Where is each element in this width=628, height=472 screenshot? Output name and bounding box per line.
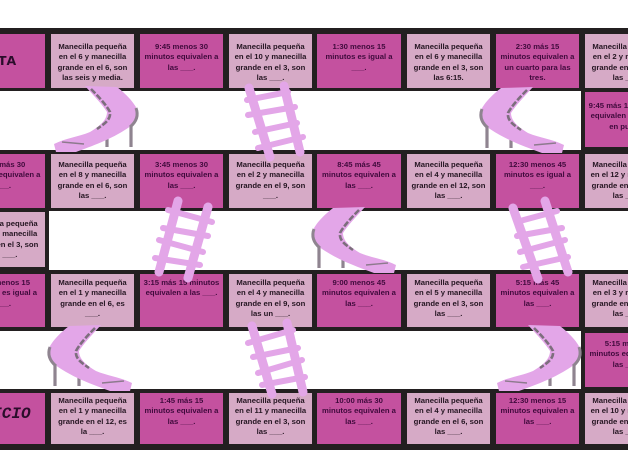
square: 4 y 12: en el 4 y manecilla [415,170,482,179]
square: 4 y 12: Manecilla pequeña [414,160,483,169]
square: 4 y 9: grande en el 9, son [236,299,305,308]
slide: middle [312,207,396,273]
square: 4 y 9: Manecilla pequeña [236,278,305,287]
square: 2 y 9: en el 2 y manecilla [237,170,304,179]
square: 12:30 menos 15: las ___. [524,417,551,426]
square: 4 y 12: las ___. [435,191,462,200]
square: 8 y 6 [51,154,134,208]
square: 9:00 menos 45: las ___. [345,299,373,308]
square: 1:30 menos 15 [317,34,401,88]
square: 3 y manecilla [585,274,628,327]
square: 12 y manecilla [585,154,628,208]
ladder: bottom [248,323,305,394]
square: 9:45 menos 30: minutos equivalen a [145,52,218,61]
square: 12:30 menos 15 [496,393,579,444]
square: 1:45 más 15 [140,393,223,444]
square: 2 y 9: grande en el 9, son [236,181,305,190]
square: 12:30 menos 45: minutos es igual a [504,170,571,179]
square: 8:45 más 45: 8:45 más 45 [337,160,381,169]
square: 5:15 más 45: minutos equivalen a [501,288,574,297]
white lane 1 [0,91,581,150]
square: 6 y 3: en el 6 y manecilla [415,52,482,61]
square: 5 y 3: en el 5 y manecilla [415,288,482,297]
square: 4 y 12: grande en el 12, son [412,181,485,190]
square: 4 y 6: en el 4 y manecilla [415,406,482,415]
square: 9:45 menos 30 [140,34,223,88]
square: 4 y 6: Manecilla pequeña [414,396,483,405]
square: 11 y 3: grande en el 3, son [236,417,305,426]
square: 4 y 6: las ___. [435,427,462,436]
white lane 3 [0,331,581,389]
slide: bottom left [48,325,132,391]
square: 6 y 3: grande en el 3, son [414,63,483,72]
square: 9:00 menos 45 [317,274,401,327]
square: 5 y 3: las ___. [435,309,462,318]
square: 2 y 9: Manecilla pequeña [236,160,305,169]
square: más 30 [0,154,45,208]
square: 10 y 3: Manecilla pequeña [236,42,305,51]
square: 10 y 3: grande en el 3, son [236,63,305,72]
square: 10 y 3: las ___. [257,73,284,82]
square: 4 y 6: grande en el 6, son [414,417,483,426]
slide: top left [54,86,138,152]
square: 8:45 más 45: las ___. [345,181,373,190]
square: 9:00 menos 45: 9:00 menos 45 [332,278,386,287]
side square: 9:45 más 15 [585,92,628,147]
square: seis y media [51,34,134,88]
square: 1 y 6: ___. [85,309,100,318]
square: 11 y 3: las ___. [257,427,284,436]
square: 12:30 menos 15: 12:30 menos 15 [509,396,566,405]
square: 1 y 12: Manecilla pequeña [58,396,127,405]
square: 4 y 6 [407,393,490,444]
square: 1:45 más 15: minutos equivalen a [145,406,218,415]
square: 2:30 más 15: minutos equivalen a [501,52,574,61]
square: 10 y 3 [229,34,312,88]
square: 2:30 más 15: tres. [529,73,546,82]
square: 1 y 12: grande en el 12, es [58,417,127,426]
square: 1 y 6 [51,274,134,327]
square: seis y media: grande en el 6, son [58,63,127,72]
square: 1:30 menos 15: ___. [352,63,366,72]
square: 12:30 menos 45: 12:30 menos 45 [509,160,566,169]
square: 10:00 más 30 [317,393,401,444]
square: 2 y 9 [229,154,312,208]
square: 10:00 más 30: 10:00 más 30 [335,396,383,405]
square: seis y media: las seis y media. [62,73,123,82]
square: 1:30 menos 15: minutos es igual a [325,52,393,61]
side square: 3 [0,212,45,267]
square: 2:30 más 15: un cuarto para las [504,63,571,72]
square: 6 y 3: las 6:15. [433,73,464,82]
square: 8 y 6: Manecilla pequeña [58,160,127,169]
square: 1:30 menos 15: 1:30 menos 15 [332,42,386,51]
square: menos 15 [0,274,45,327]
square: 1 y 6: grande en el 6, es [60,299,125,308]
square: 2 y 9: ___. [263,191,278,200]
finish square: META [0,34,45,88]
ladder: middle right [513,201,568,279]
square: 5:15 más 45: las ___. [524,299,551,308]
square: 1:45 más 15: las ___. [168,417,195,426]
square: 4 y 12 [407,154,490,208]
square: 1 y 6: en el 1 y manecilla [59,288,126,297]
square: 1:45 más 15: 1:45 más 15 [160,396,203,405]
square: 5:15 más 45: 5:15 más 45 [516,278,559,287]
square: 8 y 6: las ___. [79,191,106,200]
square: 10:00 más 30: las ___. [345,417,373,426]
square: 8 y 6: grande en el 6, son [58,181,127,190]
square: 11 y 3: Manecilla pequeña [236,396,305,405]
square: 3:15 más 15: equivalen a las ___. [146,288,217,297]
square: 8:45 más 45 [317,154,401,208]
square: 3:45 menos 30: las ___. [168,181,195,190]
ladder: middle left [155,201,212,278]
square: 12:30 menos 45 [496,154,579,208]
square: 12:30 menos 15: minutos equivalen a [501,406,574,415]
square: 3:45 menos 30: minutos equivalen a [145,170,218,179]
slide: bottom right [497,325,581,391]
square: seis y media: Manecilla pequeña [58,42,127,51]
square: 11 y 3 [229,393,312,444]
slide: top right [480,87,564,153]
square: 3:45 menos 30: 3:45 menos 30 [155,160,208,169]
square: 10:00 más 30: minutos equivalen a [322,406,396,415]
side square: 5:15 [585,333,628,387]
square: 8:45 más 45: minutos equivalen a [322,170,396,179]
square: 3:15 más 15 [140,274,223,327]
square: 1 y 12 [51,393,134,444]
square: 12:30 menos 45: ___. [530,181,545,190]
square: 2:30 más 15: 2:30 más 15 [516,42,559,51]
square: 6 y 3 [407,34,490,88]
square: 3:15 más 15: 3:15 más 15 minutos [144,278,219,287]
square: 2:30 más 15 [496,34,579,88]
square: 6 y 3: Manecilla pequeña [414,42,483,51]
square: 2 y manecilla [585,34,628,88]
square: 1 y 12: en el 1 y manecilla [59,406,126,415]
square: 11 y 3: en el 11 y manecilla [235,406,306,415]
square: 9:45 menos 30: las ___. [168,63,195,72]
square: 8 y 6: en el 8 y manecilla [59,170,126,179]
square: 4 y 9 [229,274,312,327]
square: 10 y manecilla [585,393,628,444]
square: 5 y 3: grande en el 3, son [414,299,483,308]
square: 1 y 12: la ___. [81,427,104,436]
start square: INICIO [0,393,45,444]
square: 4 y 9: en el 4 y manecilla [237,288,304,297]
square: 9:00 menos 45: minutos equivalen a [322,288,396,297]
square: 5 y 3: Manecilla pequeña [414,278,483,287]
white lane 2 [49,211,628,270]
square: 5 y 3 [407,274,490,327]
square: 4 y 9: las un ___. [251,309,290,318]
ladder: top [247,86,303,157]
square: 3:45 menos 30 [140,154,223,208]
square: 9:45 menos 30: 9:45 menos 30 [155,42,208,51]
square: 1 y 6: Manecilla pequeña [58,278,127,287]
square: 5:15 más 45 [496,274,579,327]
square: seis y media: en el 6 y manecilla [59,52,126,61]
square: 10 y 3: en el 10 y manecilla [235,52,306,61]
